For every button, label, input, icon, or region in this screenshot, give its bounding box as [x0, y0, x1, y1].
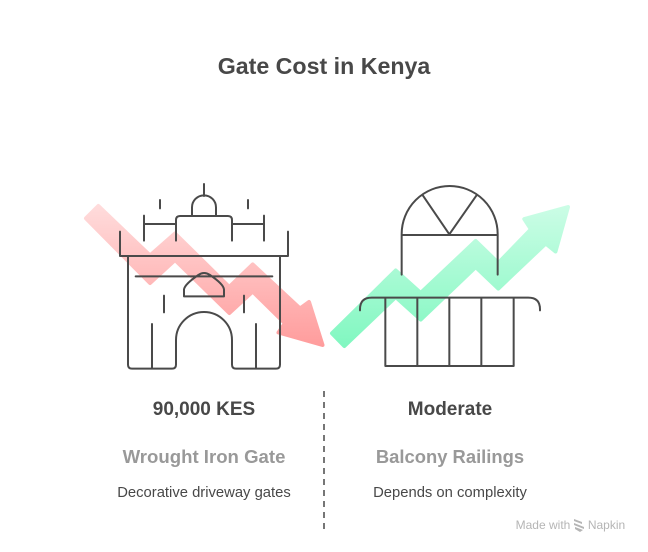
arrow: green upward trend: [332, 207, 568, 346]
icon: balcony railing: [360, 186, 540, 366]
icon: wrought iron gate: [120, 184, 288, 369]
arrow: red downward trend: [86, 206, 322, 345]
title: Gate Cost in Kenya: [218, 53, 431, 79]
value: left: 90,000 KES: [153, 399, 255, 420]
watermark: [516, 518, 625, 532]
value: right: Moderate: [408, 399, 492, 420]
watermark: Napkin: [588, 518, 625, 532]
heading: balcony railings: Balcony Railings: [376, 446, 524, 467]
heading: wrought iron gate: Wrought Iron Gate: [123, 446, 285, 467]
description: left: Decorative driveway gates: [117, 485, 291, 501]
description: right: Depends on complexity: [373, 485, 528, 501]
watermark: Made with: [516, 518, 570, 532]
center divider: [323, 391, 325, 529]
